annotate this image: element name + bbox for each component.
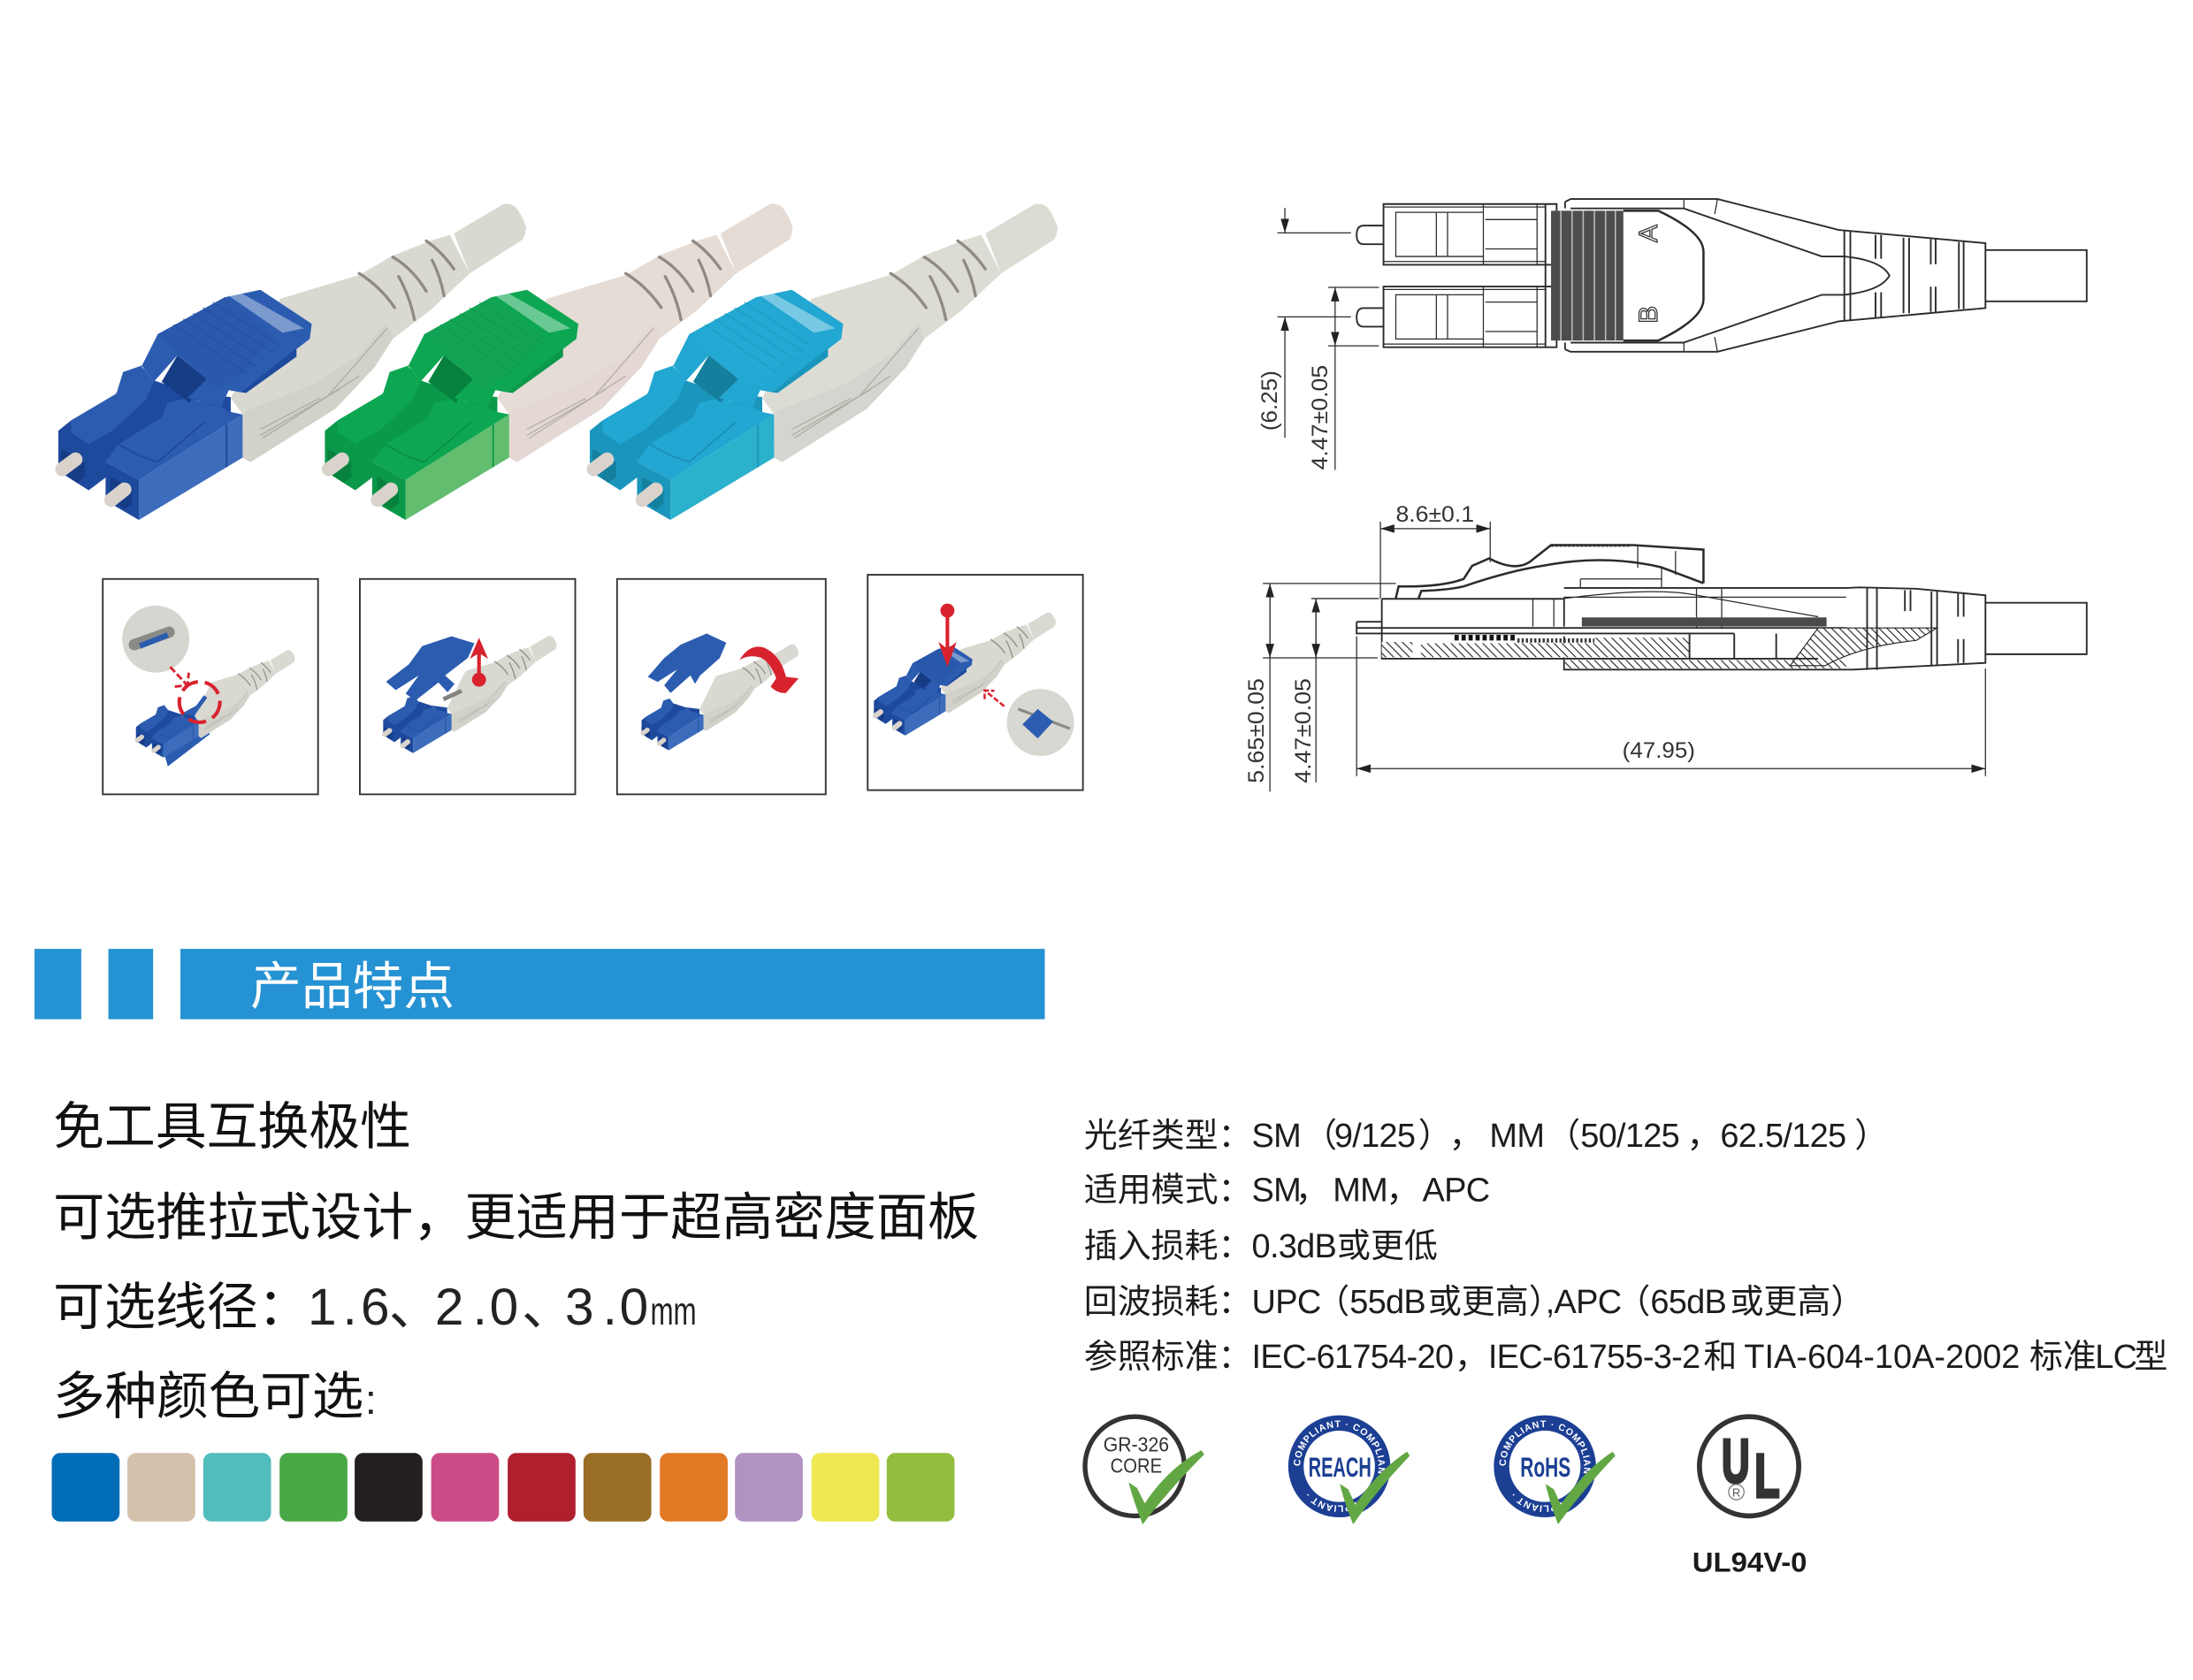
spec: return loss: （ — [1616, 1274, 1650, 1323]
specification list — [1084, 1108, 2168, 1378]
spec: fibre type: 50/125 — [1580, 1118, 1679, 1155]
spec: return loss: ） — [1830, 1274, 1864, 1323]
spec: mode: MM — [1333, 1172, 1387, 1210]
badge: RoHS compliant — [1494, 1415, 1616, 1524]
step 4 panel: reinsert latch — [867, 575, 1083, 790]
spec: mode: 适用模式： — [1084, 1163, 1251, 1211]
badge: UL mark: U — [1722, 1427, 1750, 1496]
badge: GR-326 CORE — [1085, 1417, 1204, 1524]
product photo: blue connector — [58, 203, 526, 520]
spec: standards: TIA-604-10A-2002 — [1744, 1339, 2020, 1376]
badge: REACH compliant: REACH — [1309, 1451, 1372, 1483]
spec: mode: SM — [1252, 1172, 1301, 1210]
spec: mode: ， — [1295, 1163, 1329, 1211]
technical drawing: side section view — [1244, 502, 2087, 791]
badge: UL mark: L — [1754, 1441, 1780, 1510]
badge: RoHS compliant: RoHS — [1520, 1451, 1570, 1483]
technical drawing: top view — [1257, 199, 2087, 470]
feature: colour options: 多种颜色可选 — [53, 1355, 363, 1429]
spec: fibre type: （ — [1547, 1108, 1580, 1157]
badge: GR-326 CORE: GR-326 — [1104, 1433, 1169, 1456]
label B: B — [1634, 306, 1663, 324]
badge: REACH compliant: COMPLIANT · COMPLIANT · COMPLIANT · — [1294, 1420, 1385, 1512]
spec: fibre type: MM — [1489, 1118, 1544, 1155]
feature: cable diameter: 1.6、2.0、3.0 — [308, 1279, 648, 1336]
heading text: 产品特点 — [250, 945, 455, 1019]
spec: fibre type: 62.5/125 — [1720, 1118, 1845, 1155]
spec: mode: APC — [1423, 1172, 1489, 1210]
step 3 panel: rotate boot — [617, 579, 826, 794]
dimension: 5.65±0.05: 5.65±0.05 — [1244, 678, 1269, 783]
feature: cable diameter — [53, 1265, 697, 1340]
section heading bar: product features — [34, 945, 1044, 1019]
dimension: 4.47±0.05 lower: 4.47±0.05 — [1291, 678, 1316, 783]
spec: fibre type: SM — [1252, 1118, 1301, 1155]
spec: return loss: 回波损耗： — [1084, 1274, 1251, 1323]
feature: tool-free polarity: 免工具互换极性 — [53, 1085, 411, 1159]
step 2 panel: pull latch up — [360, 579, 576, 794]
rib block — [1551, 210, 1624, 340]
spec: standards: ， — [1455, 1329, 1488, 1378]
spec: standards: 标准 — [2029, 1329, 2097, 1378]
badge: REACH compliant — [1288, 1415, 1410, 1524]
spec: return loss: 或更高 — [1428, 1274, 1529, 1323]
product photo: cyan connector — [590, 203, 1058, 520]
feature: push-pull design: 可选推拉式设计，更适用于超高密度面板 — [53, 1176, 979, 1250]
badge: UL mark: R — [1732, 1486, 1740, 1499]
dimension: 4.47±0.05: 4.47±0.05 — [1308, 365, 1333, 470]
spec: fibre type: （ — [1303, 1108, 1337, 1157]
product photo: green connector — [325, 203, 792, 520]
badge: UL mark — [1700, 1417, 1799, 1516]
colour swatches — [52, 1453, 954, 1522]
spec: mode: ， — [1386, 1163, 1419, 1211]
spec: return loss: （ — [1316, 1274, 1349, 1323]
spec: fibre type: ， — [1449, 1108, 1483, 1157]
dimension: (6.25): (6.25) — [1257, 370, 1282, 431]
UL rating label: UL94V-0 — [1693, 1546, 1807, 1578]
spec: fibre type: 9/125 — [1334, 1118, 1415, 1155]
spec: fibre type: ） — [1854, 1108, 1888, 1157]
spec: return loss: ,APC — [1546, 1284, 1621, 1321]
spec: standards: IEC-61755-3-2 — [1488, 1339, 1700, 1376]
feature: cable diameter: mm — [650, 1290, 697, 1333]
spec: return loss: 55dB — [1349, 1284, 1425, 1321]
spec: standards: 和 — [1703, 1329, 1737, 1378]
step 1 panel: locate polarity key — [103, 579, 318, 794]
spec: fibre type: ） — [1418, 1108, 1452, 1157]
spec: standards: 型 — [2135, 1329, 2168, 1378]
spec: standards: 参照标准： — [1084, 1329, 1251, 1378]
hatched sections — [1382, 638, 1846, 668]
spec: insertion loss: 插入损耗： — [1084, 1218, 1251, 1267]
spec: fibre type: 光纤类型： — [1084, 1108, 1251, 1157]
spec: standards: IEC-61754-20 — [1252, 1339, 1453, 1376]
spec: insertion loss: 0.3dB — [1252, 1228, 1336, 1265]
feature: cable diameter: 可选线径： — [53, 1265, 309, 1340]
dimension: 8.6±0.1: 8.6±0.1 — [1395, 502, 1474, 527]
badge: GR-326 CORE: CORE — [1111, 1454, 1162, 1477]
spec: return loss: 65dB — [1650, 1284, 1726, 1321]
spec: return loss: UPC — [1252, 1284, 1321, 1321]
spec: standards: LC — [2095, 1339, 2136, 1376]
label A: A — [1634, 225, 1663, 242]
badge: RoHS compliant: COMPLIANT · COMPLIANT · COMPLIANT · — [1500, 1420, 1591, 1512]
spec: insertion loss: 或更低 — [1337, 1218, 1438, 1267]
dimension: (47.95): (47.95) — [1623, 738, 1695, 763]
feature: colour options: : — [365, 1377, 377, 1424]
spec: fibre type: ， — [1686, 1108, 1720, 1157]
spec: return loss: 或更高 — [1730, 1274, 1830, 1323]
spec: return loss: ） — [1529, 1274, 1563, 1323]
feature list — [53, 1085, 979, 1429]
